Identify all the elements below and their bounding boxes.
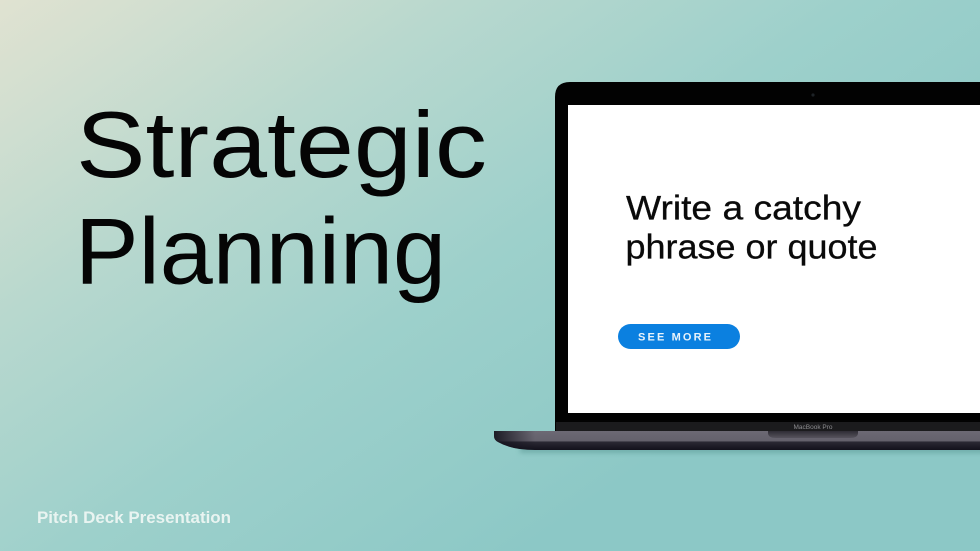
see more button: SEE MORE: [638, 332, 711, 344]
screen: [568, 105, 980, 413]
title: Planning: [75, 198, 446, 304]
screen quote: [626, 190, 878, 266]
webcam: [811, 93, 815, 97]
laptop base: [494, 431, 980, 450]
laptop mockup: [494, 82, 980, 453]
screen quote: Write a catchy: [626, 190, 861, 228]
laptop lid and bezel: [555, 82, 980, 432]
title: Strategic: [76, 92, 487, 197]
laptop shadow: [520, 447, 980, 453]
see more button: [618, 324, 740, 349]
title: [75, 92, 487, 304]
footer label: Pitch Deck Presentation: [37, 509, 231, 527]
trackpad notch: [768, 431, 858, 438]
base left tip shading: [494, 431, 535, 450]
bottom bezel strip: [556, 422, 980, 432]
MacBook Pro label: MacBook Pro: [793, 424, 833, 431]
screen quote: phrase or quote: [626, 228, 878, 266]
